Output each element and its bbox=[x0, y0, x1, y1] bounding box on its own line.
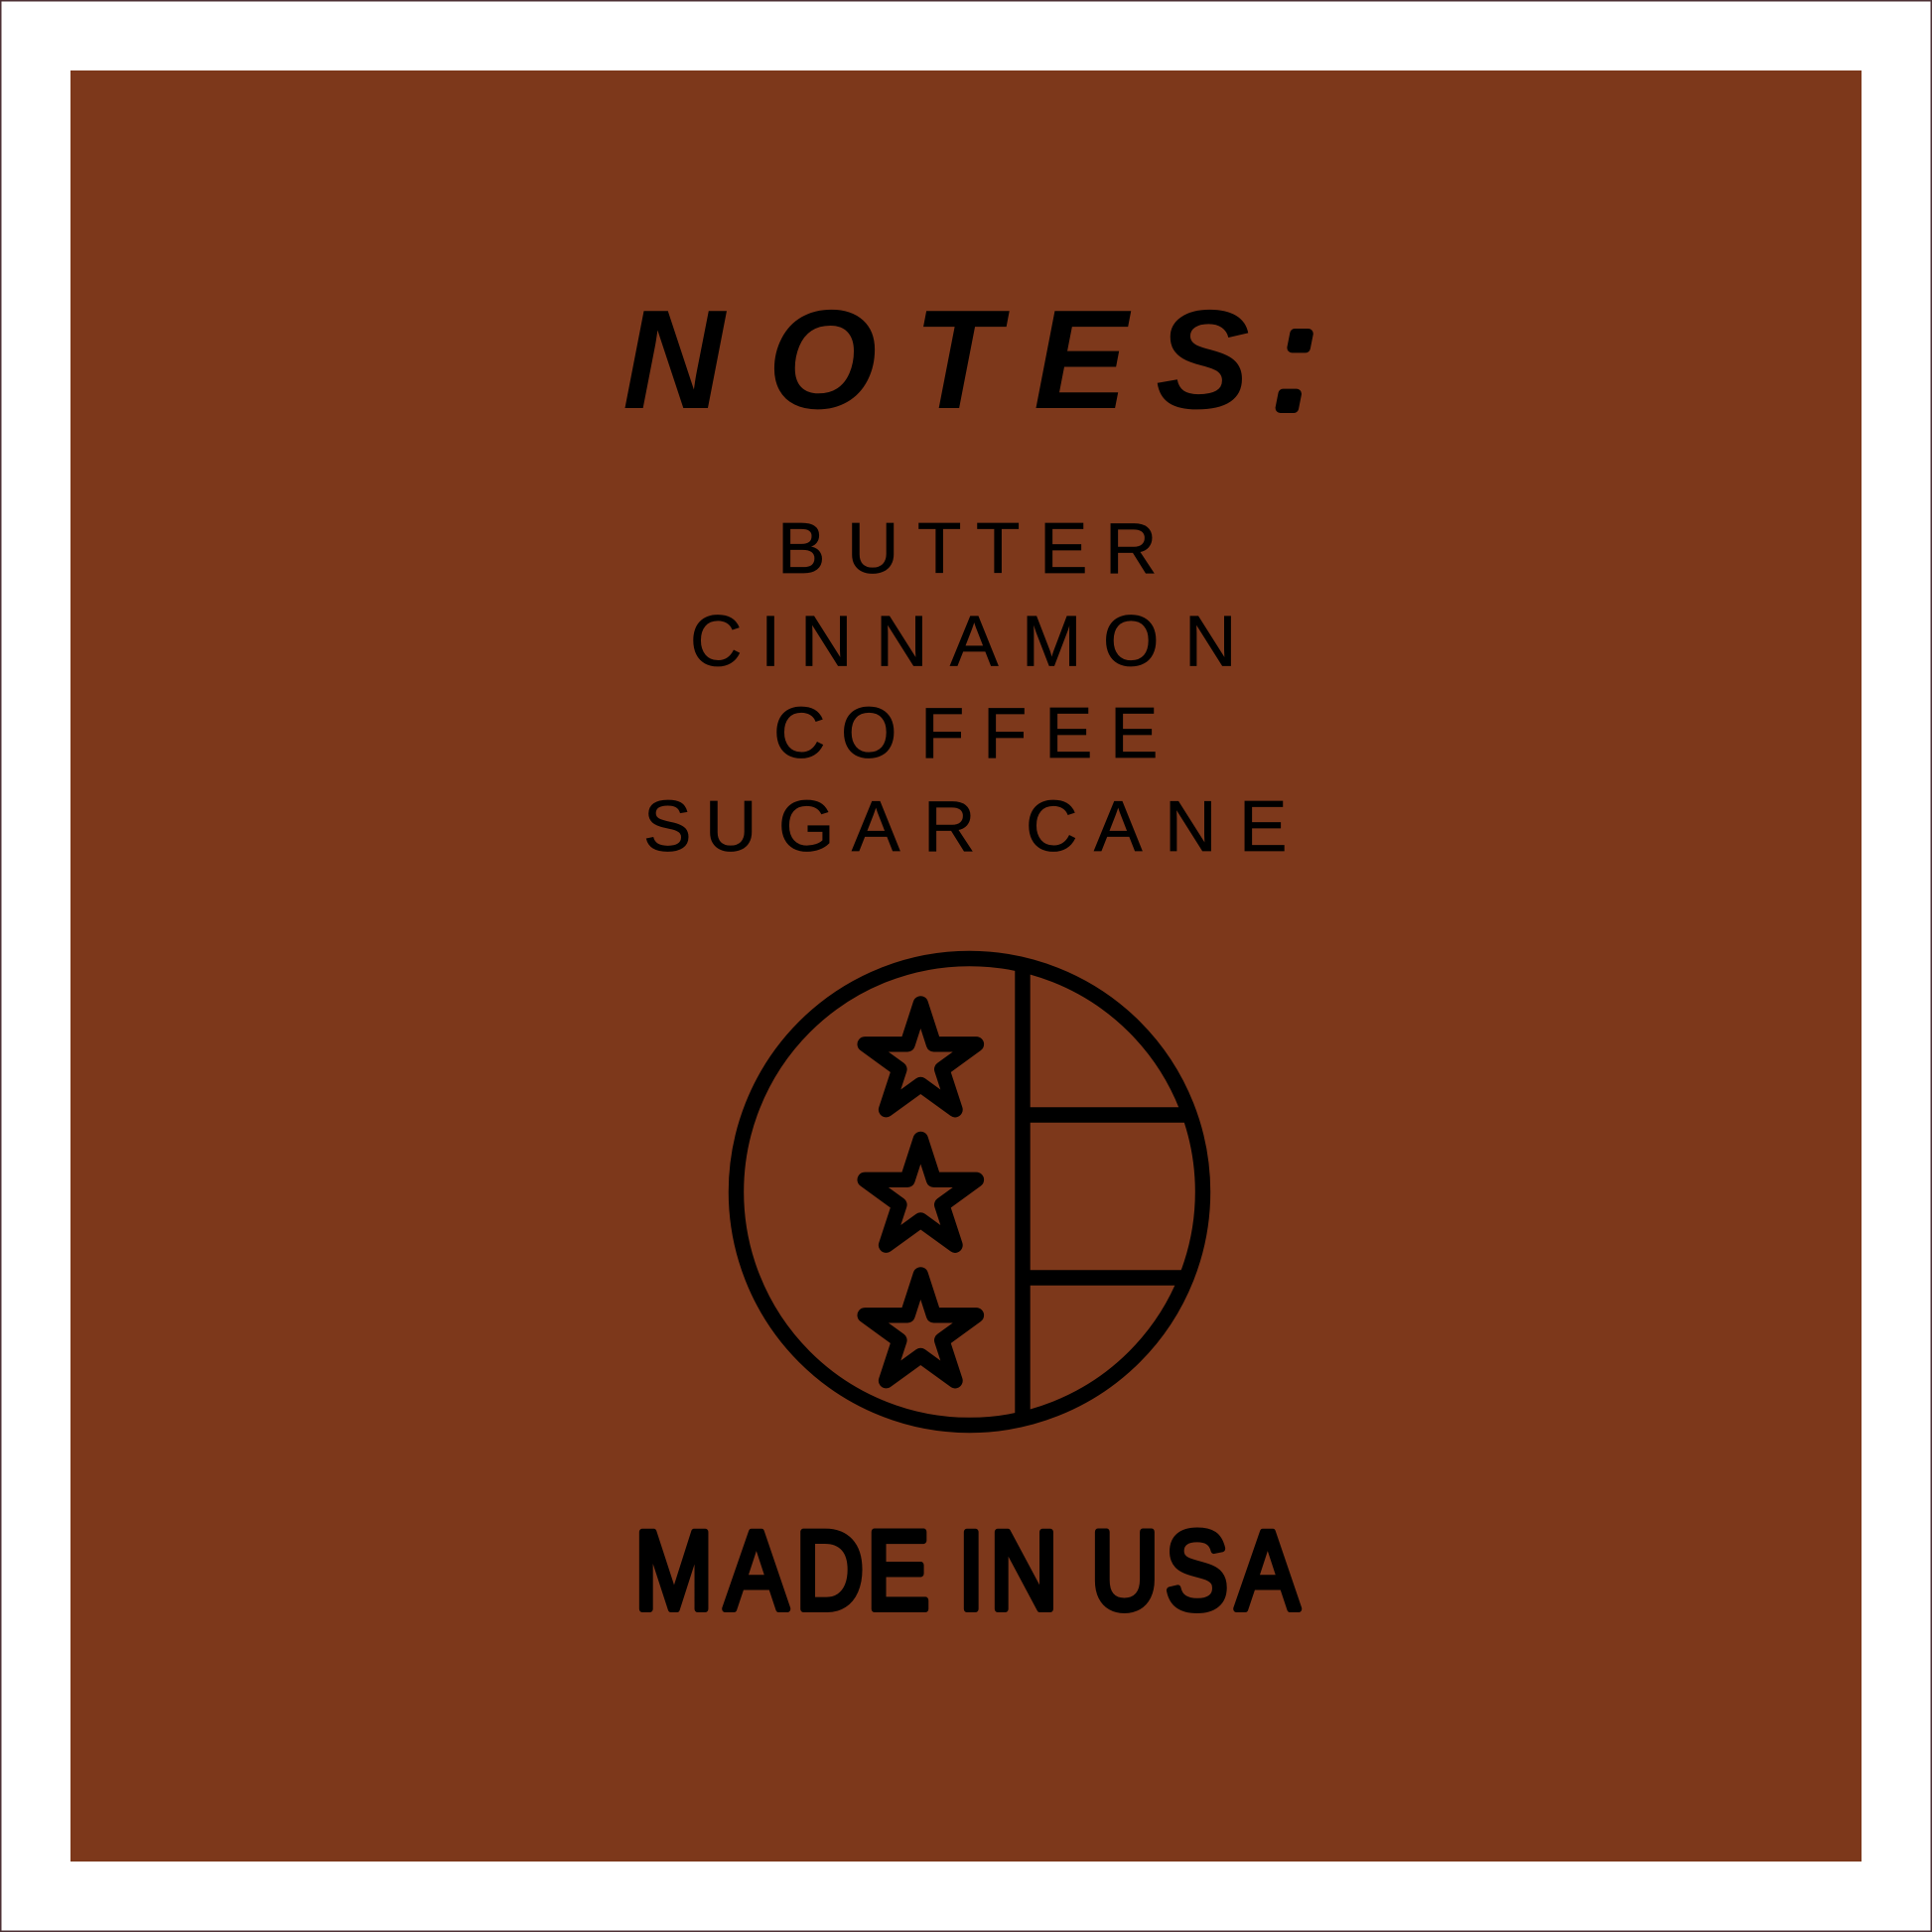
icon: middle star bbox=[865, 1140, 976, 1245]
title: notes: NOTES bbox=[622, 281, 1250, 439]
note: butter: BUTTER bbox=[777, 508, 1157, 589]
note: cinnamon: CINNAMON bbox=[690, 602, 1236, 681]
icon: circle outline bbox=[737, 959, 1203, 1426]
icon: lower horizontal stripe bbox=[1023, 1270, 1189, 1286]
icon: stars bbox=[865, 1004, 976, 1381]
text block: tasting notes bbox=[643, 508, 1287, 867]
icon: top star bbox=[865, 1004, 976, 1110]
icon: vertical divider bbox=[1015, 965, 1031, 1419]
icon: flag globe with three stars bbox=[737, 959, 1203, 1426]
footer text: made in usa: MADE IN USA bbox=[634, 1509, 1300, 1633]
icon: bottom star bbox=[865, 1275, 976, 1381]
note: sugar cane: SUGAR CANE bbox=[643, 786, 1287, 867]
icon: upper horizontal stripe bbox=[1023, 1107, 1189, 1123]
title: notes: : bbox=[1275, 281, 1313, 439]
note: coffee: COFFEE bbox=[773, 693, 1158, 773]
